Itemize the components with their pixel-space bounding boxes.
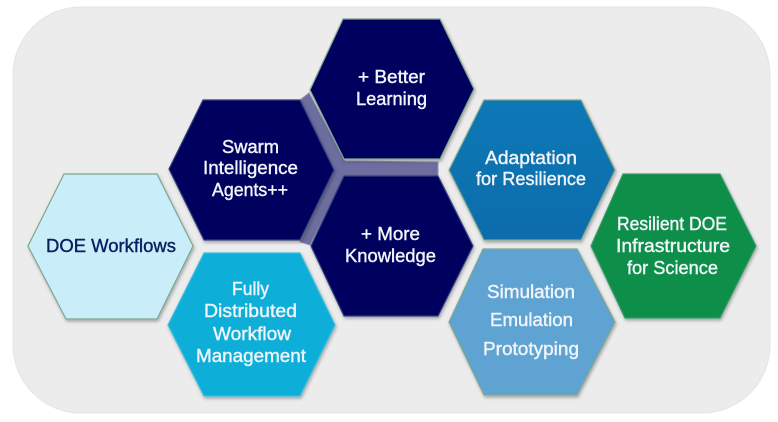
- connector: purple links between the central hexagons: [300, 93, 438, 245]
- hexagon: Resilient DOE Infrastructure for Science: [591, 174, 756, 318]
- hexagon: Simulation Emulation Prototyping: Emulation: [490, 310, 573, 330]
- hexagon: Fully Distributed Workflow Management: [168, 253, 335, 396]
- hexagon: DOE Workflows: DOE Workflows: [46, 236, 176, 256]
- hexagon: Fully Distributed Workflow Management: Fully: [232, 279, 269, 299]
- hexagon: Adaptation for Resilience: Adaptation: [485, 148, 577, 168]
- hexagon: Fully Distributed Workflow Management: Management: [196, 346, 306, 366]
- hexagon: Fully Distributed Workflow Management: Distributed: [204, 301, 297, 321]
- hexagon: Adaptation for Resilience: for Resilience: [476, 169, 586, 189]
- hexagon: + More Knowledge: [311, 176, 473, 316]
- hexagon: Swarm Intelligence Agents++: [169, 100, 334, 240]
- hexagon: Resilient DOE Infrastructure for Science: for Science: [627, 258, 718, 278]
- hexagon: + Better Learning: + Better: [358, 67, 425, 87]
- hexagon: Resilient DOE Infrastructure for Science: Infrastructure: [616, 236, 730, 256]
- hexagon: + Better Learning: Learning: [356, 89, 427, 109]
- hexagon: Fully Distributed Workflow Management: Workflow: [213, 324, 292, 344]
- hexagon: + Better Learning: [310, 19, 474, 159]
- hexagon: Swarm Intelligence Agents++: Swarm: [222, 137, 279, 157]
- hexagon: Simulation Emulation Prototyping: Simulation: [487, 282, 575, 302]
- hexagon: DOE Workflows: [28, 174, 193, 319]
- hexagon: + More Knowledge: + More: [361, 224, 420, 244]
- hexagon: Adaptation for Resilience: [449, 100, 615, 240]
- hexagon: Resilient DOE Infrastructure for Science: Resilient DOE: [617, 214, 727, 234]
- hexagon: Simulation Emulation Prototyping: Prototyping: [483, 339, 579, 359]
- hexagon: Swarm Intelligence Agents++: Intelligence: [203, 158, 298, 178]
- hexagon: Swarm Intelligence Agents++: Agents++: [212, 180, 288, 200]
- hexagon: + More Knowledge: Knowledge: [345, 246, 436, 266]
- hexagon: Simulation Emulation Prototyping: [449, 249, 615, 395]
